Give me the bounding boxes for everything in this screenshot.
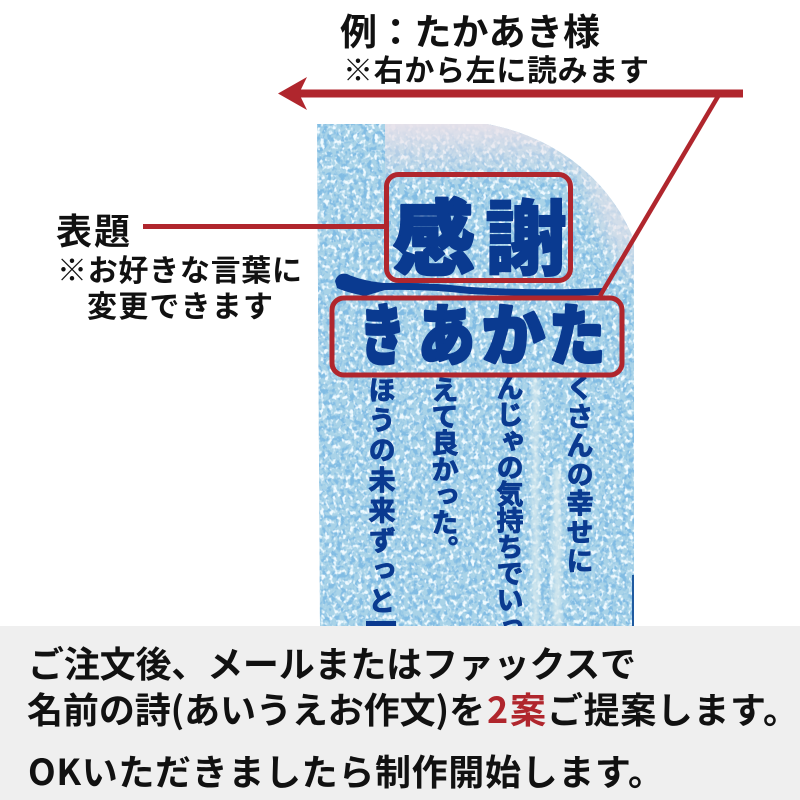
- stone title: 謝: [485, 173, 567, 292]
- stone title: 感: [393, 173, 475, 292]
- arrow: reading direction: [278, 77, 743, 296]
- bottom band: [0, 626, 800, 800]
- bottom text: [27, 636, 799, 796]
- stone initials: き: [360, 284, 405, 379]
- stone initials: [365, 302, 602, 366]
- bottom text: 2案: [487, 682, 546, 734]
- column text 2: えて良かった。: [426, 376, 464, 562]
- note: change words: ※お好きな言葉に: [57, 246, 302, 290]
- stone initials: か: [482, 282, 545, 378]
- bottom text: ご提案します。: [547, 682, 799, 734]
- note: change words: 変更できます: [87, 282, 273, 326]
- bottom dash in column 1: [366, 621, 396, 626]
- reading note: ※右から左に読みます: [343, 46, 649, 90]
- bottom text: ご注文後、メールまたはファックスで: [28, 636, 636, 688]
- initials frame: [332, 298, 622, 375]
- example heading: 例：たかあき様: [340, 2, 600, 56]
- stone title: [392, 196, 566, 277]
- stone photo: [317, 124, 640, 640]
- bottom text: OKいただきましたら制作開始します。: [28, 744, 664, 796]
- column text 4: くさんの幸せに: [560, 374, 600, 574]
- label: title: 表題: [56, 203, 130, 255]
- stone initials: あ: [418, 283, 475, 378]
- column text 3: んじゃの気持ちでいっ: [490, 374, 530, 640]
- line to title frame: [143, 224, 386, 229]
- note: change words: [57, 246, 302, 326]
- brush line under title: [335, 274, 603, 296]
- stone initials: た: [549, 282, 605, 378]
- bottom text: 名前の詩(あいうえお作文)を: [27, 682, 485, 734]
- title frame: [386, 174, 570, 280]
- column text 1: ほうの未来ずっと: [362, 376, 402, 614]
